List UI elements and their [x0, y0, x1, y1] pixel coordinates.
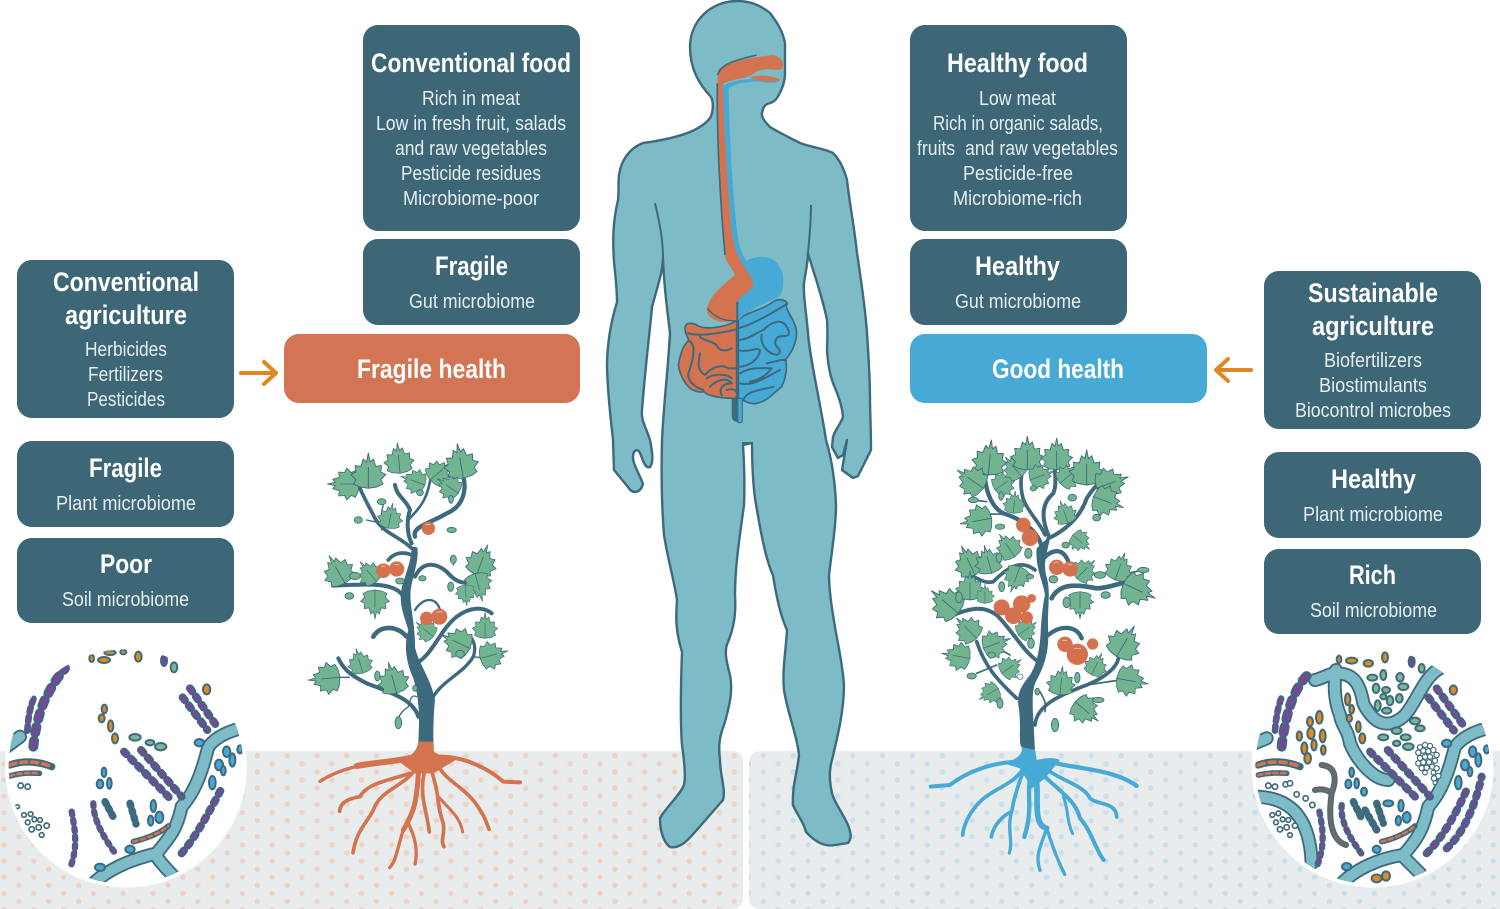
arrow: sustainable agriculture to good health — [1216, 359, 1251, 381]
box: conventional agriculture: Fertilizers — [88, 363, 163, 386]
heading box: conventional food: Rich in meat — [422, 87, 520, 110]
heading box: healthy food: Healthy food — [947, 48, 1088, 78]
heading box: healthy food: Rich in organic salads, — [933, 112, 1103, 135]
box: conventional agriculture: Herbicides — [85, 338, 167, 361]
box: sustainable agriculture: Biofertilizers — [1324, 349, 1422, 372]
banner: good health: Good health — [992, 354, 1124, 384]
box: healthy gut microbiome: Gut microbiome — [955, 290, 1081, 313]
box: healthy plant microbiome — [1264, 452, 1481, 538]
box: conventional agriculture: Conventional — [53, 267, 199, 297]
box: conventional agriculture — [17, 260, 234, 418]
banner: fragile health: Fragile health — [357, 354, 506, 384]
leaves — [920, 436, 1163, 733]
stem and branches — [953, 465, 1143, 750]
large intestine, blue — [738, 300, 796, 404]
tomatoes — [994, 518, 1098, 665]
leaves — [307, 441, 512, 729]
lips — [750, 76, 780, 82]
heading box: conventional food: Microbiome-poor — [403, 187, 539, 210]
box: sustainable agriculture: Sustainable — [1308, 278, 1438, 308]
box: conventional agriculture: agriculture — [65, 300, 187, 330]
heading box: healthy food: fruits and raw vegetables — [917, 137, 1118, 160]
panel: fragile soil — [0, 751, 743, 909]
box: sustainable agriculture: Biocontrol microbes — [1295, 399, 1451, 422]
heading box: conventional food: Conventional food — [371, 48, 571, 78]
digestive system — [678, 55, 796, 423]
oesophagus and stomach, orange half — [707, 55, 783, 322]
heading box: healthy food: Pesticide-free — [963, 162, 1073, 185]
roots, orange — [320, 738, 520, 868]
grape-like cell cluster — [1416, 742, 1441, 785]
box: fragile plant microbiome: Plant microbiome — [56, 492, 196, 515]
single cells — [1266, 652, 1489, 882]
grey fungal hypha — [1315, 765, 1346, 845]
box: rich soil microbiome: Soil microbiome — [1310, 599, 1437, 622]
heading box: healthy food — [910, 25, 1127, 231]
human body — [607, 1, 871, 847]
heading box: conventional food: and raw vegetables — [395, 137, 547, 160]
banner: fragile health — [284, 334, 580, 403]
oesophagus and stomach, blue half — [723, 79, 783, 321]
dark and orange chains — [1258, 762, 1415, 842]
arrow: conventional agriculture to fragile health — [241, 362, 276, 384]
microbiome circle: poor soil — [5, 646, 247, 888]
box: poor soil microbiome — [17, 538, 234, 623]
box: rich soil microbiome: Rich — [1349, 560, 1396, 590]
box: healthy gut microbiome: Healthy — [975, 251, 1060, 281]
heading box: healthy food: Microbiome-rich — [953, 187, 1082, 210]
box: conventional agriculture: Pesticides — [87, 388, 165, 411]
healthy tomato plant — [920, 436, 1163, 874]
box: sustainable agriculture: Biostimulants — [1319, 374, 1427, 397]
large intestine, orange — [678, 321, 737, 398]
tomatoes — [376, 522, 447, 625]
box: poor soil microbiome: Soil microbiome — [62, 588, 189, 611]
single cells — [15, 650, 243, 871]
box: healthy gut microbiome — [910, 239, 1127, 325]
rectum — [732, 398, 737, 422]
heading box: healthy food: Low meat — [979, 87, 1056, 110]
dark and orange chains — [10, 762, 168, 842]
box: poor soil microbiome: Poor — [100, 549, 152, 579]
heading box: conventional food — [363, 25, 580, 231]
box: fragile plant microbiome — [17, 441, 234, 527]
microbiome circle: rich soil — [1247, 646, 1494, 888]
box: healthy plant microbiome: Healthy — [1331, 464, 1416, 494]
heading box: conventional food: Pesticide residues — [401, 162, 541, 185]
box: fragile gut microbiome: Gut microbiome — [409, 290, 535, 313]
heading box: conventional food: Low in fresh fruit, salads — [376, 112, 566, 135]
fragile tomato plant — [307, 441, 520, 868]
box: fragile gut microbiome: Fragile — [435, 251, 508, 281]
banner: good health — [910, 334, 1207, 403]
box: sustainable agriculture: agriculture — [1312, 311, 1434, 341]
rivers of hyphae — [1247, 668, 1493, 882]
purple bacterial chains — [1275, 672, 1482, 867]
intestinal folds — [688, 304, 789, 400]
roots, blue — [931, 745, 1137, 874]
box: sustainable agriculture — [1264, 271, 1481, 429]
box: fragile plant microbiome: Fragile — [89, 453, 162, 483]
river of hyphae — [7, 727, 247, 882]
stem and branches — [333, 470, 492, 742]
box: fragile gut microbiome — [363, 239, 580, 325]
box: healthy plant microbiome: Plant microbiome — [1303, 503, 1443, 526]
box: rich soil microbiome — [1264, 549, 1481, 634]
purple bacterial chains — [27, 668, 222, 868]
panel: healthy soil — [749, 751, 1500, 909]
